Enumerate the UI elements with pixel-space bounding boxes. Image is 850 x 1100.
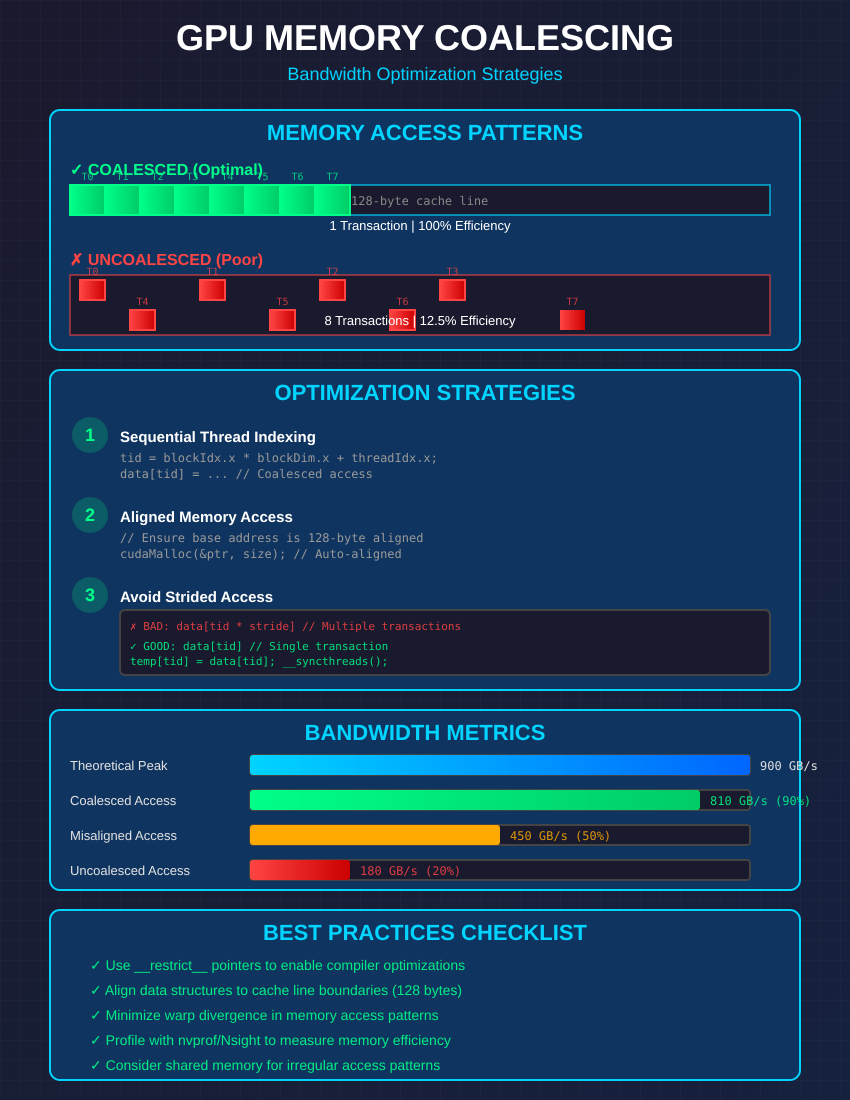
metric: misaligned access: 450 GB/s (50%) xyxy=(510,829,611,843)
strategy 1: data[tid] = ... // Coalesced access xyxy=(120,467,373,481)
metric: uncoalesced access: 180 GB/s (20%) xyxy=(360,864,461,878)
panel: optimization strategies xyxy=(50,370,800,690)
coalesced cache line: T3 xyxy=(186,172,199,183)
uncoalesced label: ✗ UNCOALESCED (Poor) xyxy=(70,252,263,269)
strategy 3: 3 xyxy=(85,585,95,605)
coalesced cache line: T1 xyxy=(116,172,129,183)
coalesced caption: 1 Transaction | 100% Efficiency xyxy=(330,218,511,233)
coalesced cache line: 128-byte cache line xyxy=(351,194,488,208)
strategy 1: Sequential Thread Indexing xyxy=(120,429,316,446)
coalesced label: ✓ COALESCED (Optimal) xyxy=(70,162,263,179)
strategy 1: tid = blockIdx.x * blockDim.x + threadIdx.x; xyxy=(120,451,438,465)
coalesced cache line xyxy=(70,172,770,215)
coalesced cache line: T5 xyxy=(256,172,269,183)
strategy 3: ✓ GOOD: data[tid] // Single transaction xyxy=(130,640,388,653)
title: GPU MEMORY COALESCING xyxy=(176,17,674,58)
strategy 3 xyxy=(72,577,770,675)
panel: memory access patterns xyxy=(50,110,800,350)
heading: best practices checklist: BEST PRACTICES CHECKLIST xyxy=(263,920,588,945)
coalesced cache line: T0 xyxy=(81,172,94,183)
coalesced cache line: T4 xyxy=(221,172,234,183)
strategy 2: 2 xyxy=(85,505,95,525)
metric: coalesced access: 810 GB/s (90%) xyxy=(710,794,811,808)
panel: best practices checklist xyxy=(50,910,800,1080)
heading: optimization strategies: OPTIMIZATION STRATEGIES xyxy=(274,380,576,405)
coalesced cache line: T2 xyxy=(151,172,164,183)
strategy 2: // Ensure base address is 128-byte aligned xyxy=(120,531,423,545)
checklist items: ✓ Align data structures to cache line boundaries (128 bytes) xyxy=(90,982,462,998)
metric: uncoalesced access: Uncoalesced Access xyxy=(70,863,190,878)
metric: theoretical peak xyxy=(70,755,818,775)
uncoalesced cache line: T3 xyxy=(446,267,459,278)
uncoalesced cache line: T0 xyxy=(86,267,99,278)
checklist items: ✓ Minimize warp divergence in memory access patterns xyxy=(90,1007,439,1023)
panel: bandwidth metrics xyxy=(50,710,818,890)
metric: uncoalesced access xyxy=(70,860,750,880)
strategy 1 xyxy=(72,417,438,481)
uncoalesced cache line: T1 xyxy=(206,267,219,278)
metric: coalesced access: Coalesced Access xyxy=(70,793,177,808)
metric: theoretical peak: 900 GB/s xyxy=(760,759,818,773)
metric: coalesced access xyxy=(70,790,811,810)
checklist items: ✓ Use __restrict__ pointers to enable compiler optimizations xyxy=(90,957,465,973)
strategy 2 xyxy=(72,497,423,561)
strategy 3: temp[tid] = data[tid]; __syncthreads(); xyxy=(130,655,388,668)
checklist items: ✓ Profile with nvprof/Nsight to measure memory efficiency xyxy=(90,1032,451,1048)
strategy 1: 1 xyxy=(85,425,95,445)
checklist items xyxy=(90,957,465,1073)
metric: misaligned access: Misaligned Access xyxy=(70,828,177,843)
uncoalesced cache line: T2 xyxy=(326,267,339,278)
heading: bandwidth metrics: BANDWIDTH METRICS xyxy=(305,720,545,745)
uncoalesced cache line xyxy=(70,267,770,335)
subtitle: Bandwidth Optimization Strategies xyxy=(287,64,563,84)
strategy 2: cudaMalloc(&ptr, size); // Auto-aligned xyxy=(120,547,402,561)
uncoalesced cache line: T6 xyxy=(396,297,409,308)
coalesced cache line: T6 xyxy=(291,172,304,183)
uncoalesced caption: 8 Transactions | 12.5% Efficiency xyxy=(324,313,516,328)
uncoalesced cache line: T5 xyxy=(276,297,289,308)
checklist items: ✓ Consider shared memory for irregular access patterns xyxy=(90,1057,440,1073)
heading: memory access patterns: MEMORY ACCESS PATTERNS xyxy=(267,120,583,145)
strategy 3: Avoid Strided Access xyxy=(120,589,273,606)
strategy 3: ✗ BAD: data[tid * stride] // Multiple transactions xyxy=(130,620,461,633)
metric: misaligned access xyxy=(70,825,750,845)
metric: theoretical peak: Theoretical Peak xyxy=(70,758,168,773)
strategy 2: Aligned Memory Access xyxy=(120,509,293,526)
coalesced cache line: T7 xyxy=(326,172,339,183)
uncoalesced cache line: T4 xyxy=(136,297,149,308)
uncoalesced cache line: T7 xyxy=(566,297,579,308)
